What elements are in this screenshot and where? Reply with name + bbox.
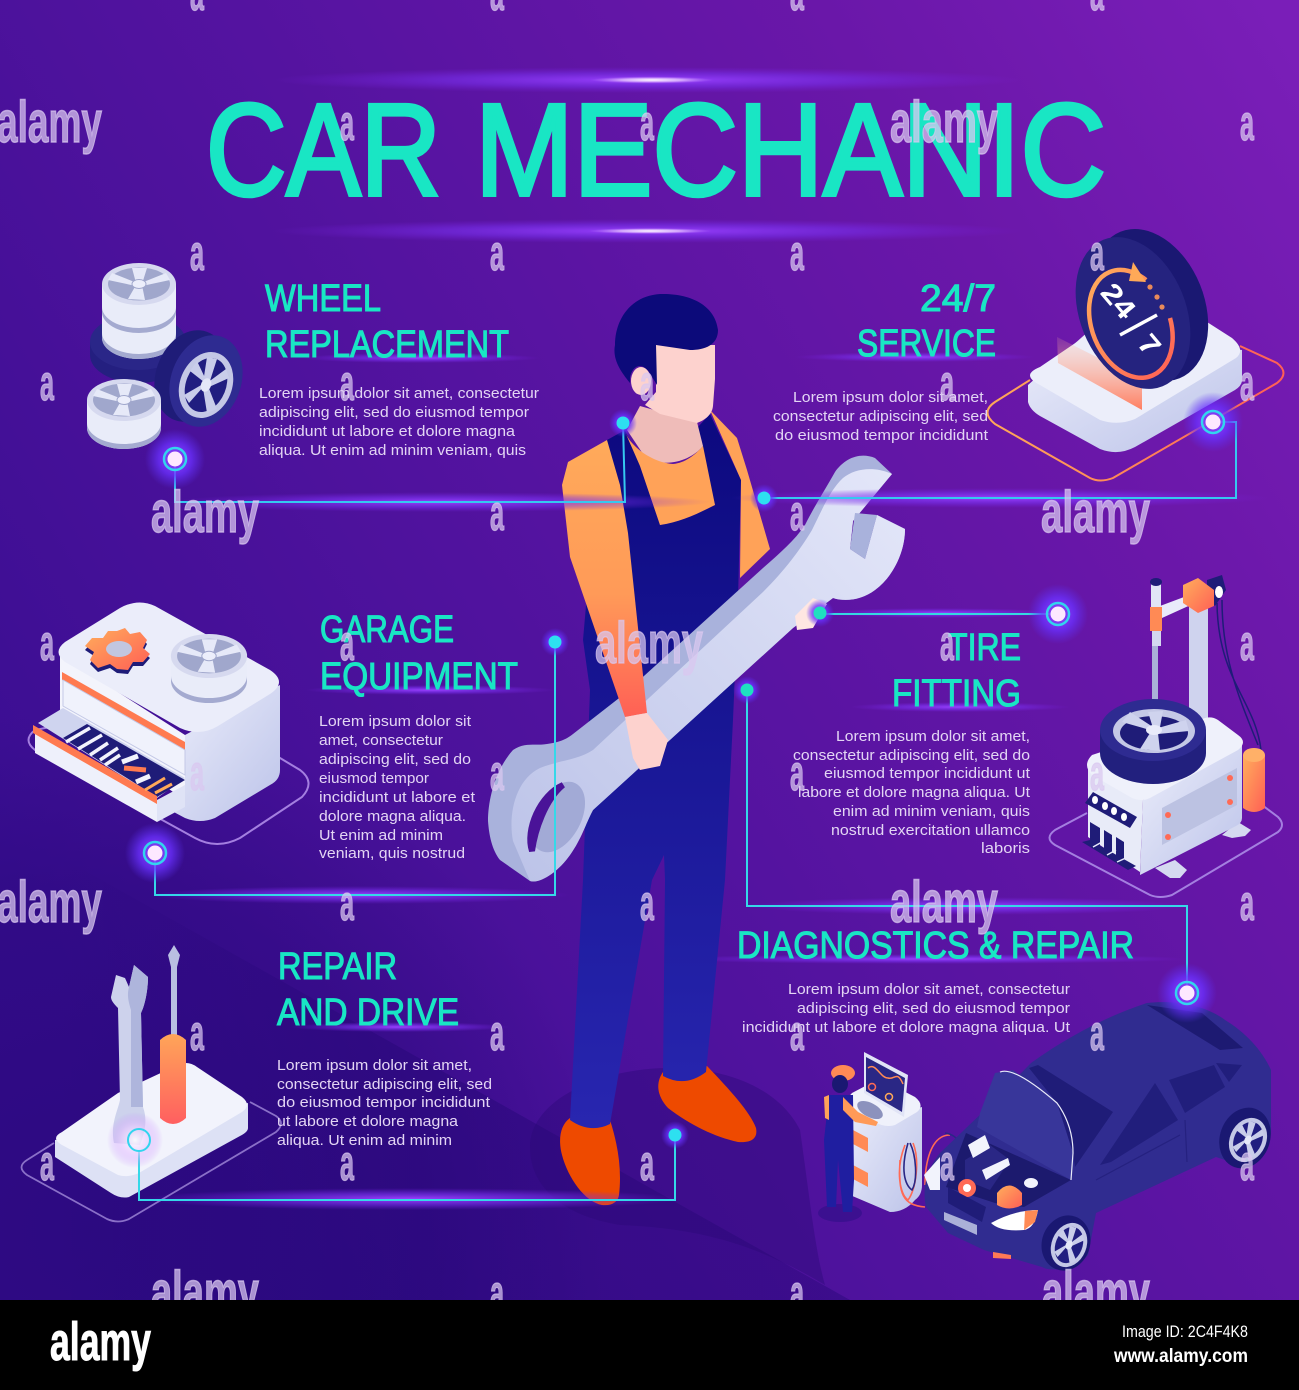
technician	[824, 1065, 878, 1212]
overalls	[570, 414, 741, 1128]
right sleeve	[710, 410, 770, 578]
front rim	[87, 379, 161, 449]
text: garage equipment: dolore magna aliqua.	[319, 809, 466, 825]
door lines	[1096, 1120, 1187, 1180]
heading: tire fitting	[892, 627, 1021, 715]
watermarks: alamy	[890, 870, 998, 935]
base	[55, 1103, 248, 1198]
text: tire fitting: eiusmod tempor incididunt ut	[824, 766, 1030, 782]
watermarks: a	[1240, 615, 1255, 671]
left hand	[625, 713, 668, 770]
windshield	[1029, 1065, 1113, 1167]
watermarks: a	[790, 485, 805, 541]
face	[645, 345, 715, 423]
icon: wheel replacement	[87, 263, 255, 449]
text: wheel replacement: aliqua. Ut enim ad minim veniam, quis	[259, 443, 526, 459]
base	[1028, 330, 1242, 452]
watermarks: a	[40, 615, 55, 671]
cabinet front	[60, 655, 185, 800]
drawer stripe	[62, 672, 185, 750]
neck	[627, 406, 703, 463]
heading: repair and drive	[277, 946, 459, 1034]
heading: wheel replacement	[265, 278, 509, 366]
heading: tire fitting: FITTING	[892, 673, 1021, 715]
drawers	[853, 1130, 868, 1187]
cables	[1217, 600, 1261, 750]
icon: tire fitting machine	[1050, 575, 1282, 897]
cabinet side	[170, 685, 280, 821]
watermarks: a	[640, 95, 655, 151]
jaw inner wall	[850, 513, 877, 559]
watermarks: alamy	[151, 480, 259, 545]
rim on cabinet	[171, 634, 247, 703]
text: diagnostics and repair: adipiscing elit, sed do eiusmod tempor	[797, 1001, 1070, 1017]
pedal panel	[1085, 792, 1137, 828]
watermarks: a	[340, 355, 355, 411]
text: tire fitting: Lorem ipsum dolor sit amet,	[836, 729, 1030, 745]
head	[1207, 575, 1226, 606]
rear wheel	[1211, 1100, 1279, 1176]
title	[206, 76, 1106, 223]
watermarks: a	[1240, 1135, 1255, 1191]
heading: 24/7 service: SERVICE	[857, 323, 996, 365]
platform outline	[1050, 805, 1282, 897]
screwdriver	[160, 945, 186, 1124]
watermarks: a	[40, 1135, 55, 1191]
connector: repair and drive	[107, 1112, 689, 1210]
connector: 24/7 service	[730, 392, 1270, 512]
text: tire fitting: laboris	[981, 841, 1030, 857]
footer bar	[0, 1300, 1299, 1390]
heading: garage equipment	[320, 609, 518, 698]
spring and rod	[1152, 645, 1158, 705]
heading: 24/7 service: 24/7	[920, 278, 996, 320]
text: repair and drive: Lorem ipsum dolor sit amet,	[277, 1058, 472, 1074]
chest shirt	[625, 432, 715, 525]
text: tire fitting: enim ad minim veniam, quis	[833, 804, 1030, 820]
cabinet top	[58, 602, 279, 732]
wrench	[488, 456, 905, 881]
text: tire fitting: nostrud exercitation ullamco	[831, 823, 1030, 839]
heading: wheel replacement: WHEEL	[265, 278, 381, 320]
text: wheel replacement: Lorem ipsum dolor sit amet, consectetur	[259, 386, 539, 402]
platform outline	[988, 346, 1284, 480]
icon: 24/7 service	[988, 212, 1284, 480]
gear	[85, 628, 150, 674]
right hand	[795, 598, 827, 630]
rim stack	[102, 310, 176, 359]
watermarks: alamy	[0, 870, 102, 935]
watermarks: alamy	[890, 90, 998, 155]
side windows	[1100, 1083, 1178, 1165]
watermarks: alamy	[1041, 480, 1150, 545]
clock ring	[1089, 270, 1173, 378]
shoes	[560, 1118, 620, 1205]
watermarks: a	[1240, 875, 1255, 931]
standing wheel	[142, 320, 255, 437]
watermarks: a	[940, 615, 955, 671]
monitor	[864, 1052, 908, 1117]
text: garage equipment: Ut enim ad minim	[319, 828, 443, 844]
text: diagnostics and repair: Lorem ipsum dolor sit amet, consectetur	[788, 982, 1070, 998]
title: CAR	[206, 76, 441, 223]
plate	[1162, 768, 1237, 845]
machine shadow	[818, 1204, 862, 1222]
floor band	[0, 823, 850, 1300]
heading: wheel replacement: REPLACEMENT	[265, 324, 509, 366]
text: tire fitting: consectetur adipiscing elit, sed do	[793, 748, 1030, 764]
text: garage equipment: amet, consectetur	[319, 733, 443, 749]
car body	[925, 1002, 1271, 1269]
watermarks: alamy	[151, 1260, 259, 1325]
text: repair and drive: aliqua. Ut enim ad minim	[277, 1133, 452, 1149]
footer logo: alamy	[50, 1312, 151, 1372]
platform outline	[22, 1102, 281, 1222]
base reflection	[1057, 337, 1142, 410]
illustration: car with open hood	[924, 1002, 1279, 1278]
heading: garage equipment: EQUIPMENT	[320, 656, 518, 698]
watermarks: a	[490, 225, 505, 281]
connector: tire fitting	[806, 584, 1088, 644]
connector: garage equipment	[125, 628, 570, 904]
footer image id: Image ID: 2C4F4K8	[1122, 1322, 1248, 1341]
text: garage equipment	[319, 714, 475, 862]
text: repair and drive: consectetur adipiscing elit, sed	[277, 1077, 492, 1093]
text: garage equipment: incididunt ut labore et	[319, 790, 475, 806]
hair	[614, 294, 718, 385]
text: 24/7 service: Lorem ipsum dolor sit amet,	[793, 390, 988, 406]
watermarks: alamy	[1042, 1260, 1150, 1325]
watermarks: a	[790, 1265, 805, 1321]
watermarks: a	[340, 95, 355, 151]
watermarks: a	[940, 355, 955, 411]
title glow streaks	[273, 67, 1023, 243]
tire stack	[90, 342, 186, 383]
text: diagnostics and repair: incididunt ut labore et dolore magna aliqua. Ut	[742, 1020, 1070, 1036]
watermarks: a	[790, 745, 805, 801]
orange tank	[1243, 755, 1265, 812]
wrench	[111, 965, 148, 1145]
pedals	[1090, 822, 1124, 864]
connector: wheel replacement	[145, 409, 710, 512]
text: repair and drive	[277, 1058, 492, 1149]
heading: repair and drive: AND DRIVE	[277, 992, 459, 1034]
watermarks: a	[640, 1135, 655, 1191]
corner shading	[0, 700, 620, 1300]
icon: repair and drive tools	[22, 945, 281, 1222]
watermarks: a	[490, 745, 505, 801]
icon: diagnostics machine and technician	[818, 1052, 965, 1222]
column	[1189, 603, 1208, 723]
watermarks: a	[1240, 95, 1255, 151]
text: repair and drive: ut labore et dolore magna	[277, 1114, 459, 1130]
watermarks: a	[790, 1005, 805, 1061]
watermarks: a	[190, 225, 205, 281]
watermarks: a	[1090, 225, 1105, 281]
feet	[1155, 822, 1251, 878]
left arm	[562, 440, 647, 717]
heading: garage equipment: GARAGE	[320, 609, 454, 651]
watermarks: a	[1240, 355, 1255, 411]
arm	[1160, 594, 1195, 618]
text: wheel replacement: adipiscing elit, sed do eiusmod tempor	[259, 405, 529, 421]
footer url: www.alamy.com	[1113, 1346, 1248, 1367]
icon: garage equipment	[28, 602, 309, 844]
keyboard	[854, 1097, 886, 1123]
text: repair and drive: do eiusmod tempor incididunt	[277, 1095, 490, 1111]
text: tire fitting	[793, 729, 1030, 857]
text: garage equipment: eiusmod tempor	[319, 771, 429, 787]
machine body	[850, 1095, 922, 1212]
sunroof	[1147, 1005, 1243, 1050]
watermarks: a	[490, 1005, 505, 1061]
text: 24/7 service	[773, 390, 988, 444]
ear	[631, 367, 651, 395]
heading: 24/7 service	[857, 278, 996, 365]
heading: tire fitting: TIRE	[948, 627, 1021, 669]
watermarks: a	[1090, 745, 1105, 801]
watermarks: alamy	[595, 611, 703, 676]
text: diagnostics and repair	[742, 982, 1070, 1036]
front wheel	[1034, 1208, 1098, 1278]
text: wheel replacement	[259, 386, 539, 459]
tools	[66, 728, 120, 765]
ground shadow	[530, 1068, 825, 1285]
engine	[958, 1135, 1038, 1208]
title: MECHANIC	[475, 76, 1106, 223]
watermarks: a	[190, 745, 205, 801]
front lights and grille	[991, 1210, 1038, 1230]
watermarks: a	[340, 875, 355, 931]
watermarks: a	[640, 875, 655, 931]
engine bay	[946, 1133, 1071, 1207]
watermarks: a	[490, 1265, 505, 1321]
open drawer	[33, 708, 185, 822]
illustration: mechanic holding wrench	[488, 294, 905, 1285]
text: 24/7 service: do eiusmod tempor incididunt	[775, 428, 988, 444]
watermarks: a	[340, 1135, 355, 1191]
cables	[899, 1135, 950, 1207]
watermarks: a	[40, 355, 55, 411]
wrench ring hole	[520, 773, 596, 861]
watermarks: a	[490, 485, 505, 541]
watermarks: a	[940, 1135, 955, 1191]
platform outline	[28, 725, 309, 844]
text: garage equipment: adipiscing elit, sed do	[319, 752, 471, 768]
text: garage equipment: Lorem ipsum dolor sit	[319, 714, 471, 730]
connector: diagnostics and repair	[733, 676, 1217, 1023]
tire	[1100, 699, 1206, 784]
text: garage equipment: veniam, quis nostrud	[319, 846, 465, 862]
watermarks: a	[640, 355, 655, 411]
text: 24/7 service: consectetur adipiscing elit, sed	[773, 409, 988, 425]
raised hood	[977, 1070, 1073, 1180]
text: wheel replacement: incididunt ut labore et dolore magna	[259, 424, 516, 440]
watermarks: alamy	[0, 90, 102, 155]
heading: repair and drive: REPAIR	[278, 946, 397, 988]
machine body	[1088, 767, 1143, 872]
watermarks: a	[1090, 1005, 1105, 1061]
heading: diagnostics and repair: DIAGNOSTICS & REPAIR	[737, 925, 1134, 967]
heading underline streaks	[290, 352, 1190, 1032]
watermarks: a	[790, 225, 805, 281]
watermarks: a	[340, 615, 355, 671]
clock disc: 7	[1131, 328, 1167, 362]
clock disc	[1054, 212, 1230, 406]
watermarks: a	[190, 1005, 205, 1061]
clock label: 24	[1094, 277, 1142, 325]
text: tire fitting: labore et dolore magna aliqua. Ut	[798, 785, 1030, 801]
